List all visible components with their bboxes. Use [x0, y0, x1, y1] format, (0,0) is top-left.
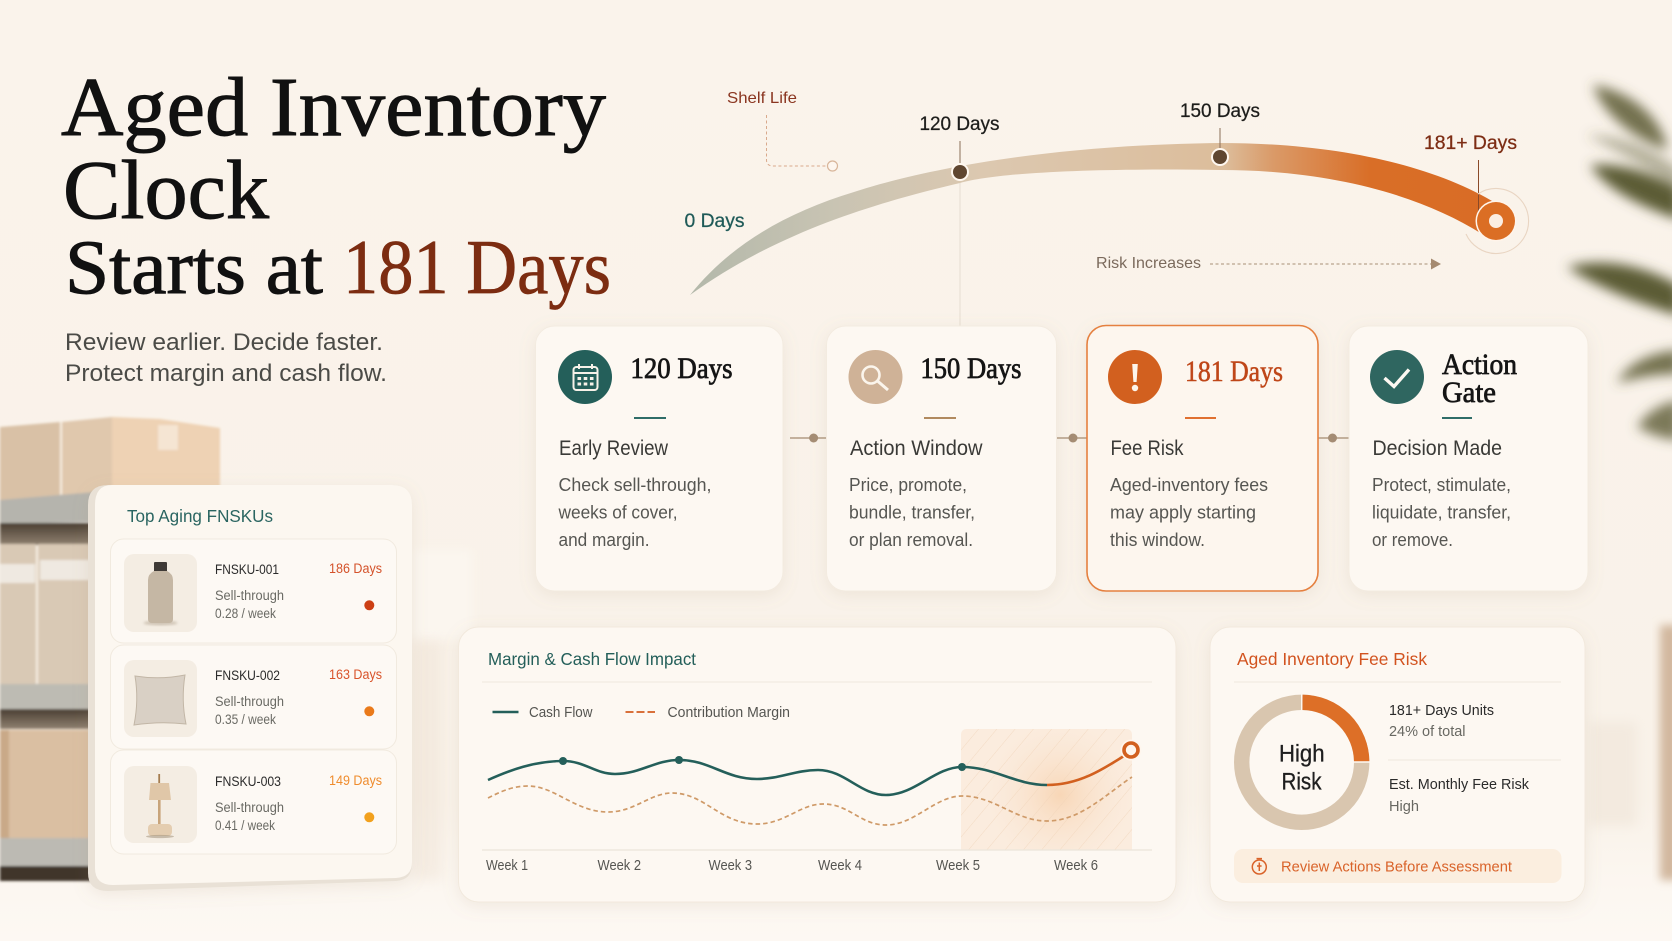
accent — [1442, 417, 1472, 419]
card title: 181 Days — [1185, 355, 1283, 388]
donut center label — [1279, 740, 1324, 796]
row: FNSKU-001: 186 Days — [329, 561, 382, 576]
card title: 150 Days — [920, 352, 1022, 385]
blurred background boxes right — [1589, 625, 1672, 880]
timeline arc — [684, 90, 1529, 326]
accent — [634, 417, 666, 419]
shelf life callout — [727, 90, 838, 171]
legend: Cash Flow — [529, 705, 593, 721]
card: 120 days — [536, 326, 783, 591]
stat: 181+ days units — [1389, 702, 1494, 740]
icon: magnifier — [848, 350, 902, 404]
card body: Aged-inventory fees — [1110, 475, 1268, 495]
warehouse shelves and boxes — [0, 417, 472, 881]
week axis labels: Week 6 — [1054, 858, 1098, 874]
row: FNSKU-002: 0.35 / week — [215, 712, 276, 727]
title: Starts at — [65, 224, 323, 310]
panel heading: Aged Inventory Fee Risk — [1237, 649, 1427, 669]
drop line from 120 days — [959, 180, 961, 326]
donut center label: Risk — [1282, 768, 1322, 796]
accent — [924, 417, 956, 419]
card body — [1372, 475, 1511, 550]
title: Clock — [63, 144, 269, 237]
label 150 days: 150 Days — [1180, 101, 1260, 122]
card body — [1110, 475, 1268, 550]
panel heading: Top Aging FNSKUs — [127, 506, 273, 526]
contribution margin series — [488, 777, 1132, 825]
card body: Check sell-through, — [558, 475, 712, 495]
card body: weeks of cover, — [558, 502, 678, 522]
product: lamp — [146, 774, 174, 838]
row: FNSKU-002: FNSKU-002 — [215, 668, 280, 683]
end marker — [1120, 740, 1142, 760]
card body — [558, 475, 712, 550]
connectors between cards — [790, 434, 1349, 442]
panel: margin and cash flow impact — [458, 627, 1176, 902]
icon: alert — [1108, 350, 1162, 404]
card title: 120 Days — [630, 352, 732, 385]
card subtitle: Early Review — [559, 437, 669, 460]
row: FNSKU-001: 0.28 / week — [215, 606, 276, 621]
card title: Gate — [1442, 376, 1496, 409]
panel: top aging FNSKUs — [88, 485, 412, 891]
card title: Action — [1442, 348, 1517, 381]
week axis labels: Week 5 — [936, 858, 980, 874]
card body: bundle, transfer, — [849, 502, 975, 522]
row: FNSKU-002: Sell-through — [215, 694, 284, 709]
donut chart — [1242, 694, 1370, 822]
stat: 181+ days units: 181+ Days Units — [1389, 702, 1494, 719]
action banner — [1234, 849, 1562, 883]
stat: 181+ days units: 24% of total — [1389, 723, 1466, 740]
card body: may apply starting — [1110, 502, 1256, 522]
week axis labels: Week 4 — [818, 858, 862, 874]
panel heading: Margin & Cash Flow Impact — [488, 649, 696, 669]
stat: monthly fee risk — [1389, 776, 1529, 815]
product: pillow — [134, 675, 186, 725]
card subtitle: Decision Made — [1372, 437, 1502, 460]
action banner: Review Actions Before Assessment — [1281, 860, 1512, 876]
donut center label: High — [1279, 740, 1324, 768]
risk increases arrow — [1096, 255, 1441, 272]
card: 150 days — [826, 326, 1056, 591]
label 181+ days: 181+ Days — [1424, 133, 1517, 154]
week axis labels: Week 3 — [708, 858, 752, 874]
product: bottle — [144, 562, 178, 626]
row: FNSKU-002 — [110, 645, 396, 749]
row: FNSKU-003 — [110, 750, 396, 854]
line chart — [482, 729, 1152, 850]
row: FNSKU-003: 0.41 / week — [215, 818, 275, 833]
marker 150 days — [1211, 128, 1229, 166]
row: FNSKU-002: 163 Days — [329, 667, 382, 682]
subtitle: Protect margin and cash flow. — [65, 360, 387, 387]
row: FNSKU-003: 149 Days — [329, 773, 382, 788]
row: FNSKU-001: FNSKU-001 — [215, 562, 279, 577]
row: FNSKU-003: Sell-through — [215, 800, 284, 815]
cash flow risk segment — [1047, 754, 1127, 785]
shelf life callout: Shelf Life — [727, 90, 797, 107]
risk increases arrow: Risk Increases — [1096, 255, 1201, 272]
subtitle: Review earlier. Decide faster. — [65, 329, 383, 356]
label 0 days: 0 Days — [684, 211, 744, 232]
row: FNSKU-001: Sell-through — [215, 588, 284, 603]
week axis labels: Week 1 — [486, 858, 528, 874]
card body: Protect, stimulate, — [1372, 475, 1511, 495]
card body: liquidate, transfer, — [1372, 502, 1511, 522]
cash flow series — [488, 760, 1047, 795]
arc band — [690, 143, 1497, 295]
card body: and margin. — [558, 530, 650, 550]
stat: monthly fee risk: Est. Monthly Fee Risk — [1389, 776, 1529, 793]
panel: aged inventory fee risk — [1210, 627, 1585, 902]
card subtitle: Action Window — [850, 437, 983, 460]
week axis labels: Week 2 — [598, 858, 641, 874]
card title — [1442, 348, 1517, 409]
title — [61, 61, 611, 310]
card body: Price, promote, — [849, 475, 967, 495]
card: 181 days — [1087, 326, 1318, 591]
legend: Contribution Margin — [668, 705, 790, 721]
stat: monthly fee risk: High — [1389, 798, 1419, 815]
label 120 days: 120 Days — [920, 114, 1000, 135]
card body: or plan removal. — [849, 530, 973, 550]
card subtitle: Fee Risk — [1110, 437, 1184, 460]
marker 181+ days — [1466, 160, 1529, 254]
icon: timer — [1252, 859, 1266, 874]
row: FNSKU-003: FNSKU-003 — [215, 774, 281, 789]
icon: calendar — [558, 350, 612, 404]
icon: check — [1370, 350, 1424, 404]
card body: this window. — [1110, 530, 1205, 550]
plant leaves — [1567, 85, 1672, 440]
card: action gate — [1349, 326, 1588, 591]
marker 120 days — [951, 141, 969, 181]
week axis labels — [486, 858, 1098, 874]
subtitle — [65, 329, 387, 387]
title: Aged Inventory — [61, 61, 606, 154]
card body: or remove. — [1372, 530, 1453, 550]
row: FNSKU-001 — [110, 539, 396, 643]
accent — [1185, 417, 1216, 419]
card body — [849, 475, 975, 550]
title: 181 Days — [343, 224, 611, 310]
legend — [492, 705, 790, 721]
risk highlight zone — [961, 729, 1132, 850]
